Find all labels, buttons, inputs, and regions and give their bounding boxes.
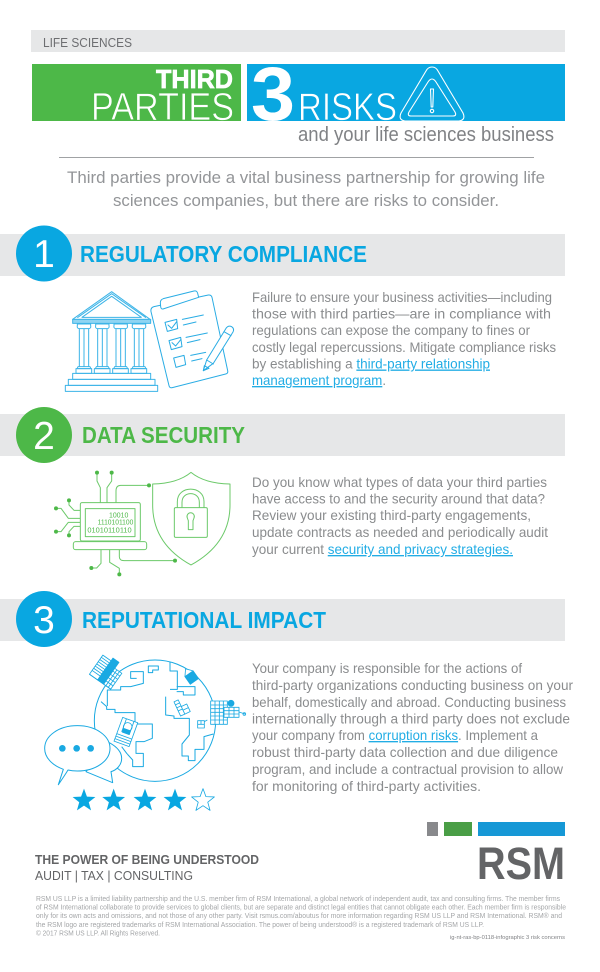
body text: reputational impact: Your company is responsible for the actions of	[252, 661, 522, 676]
body text: reputational impact: behalf, domestically and abroad. Conducting business	[252, 695, 566, 710]
footer: logo blocks and RSM logo: RSM	[477, 838, 565, 889]
icon: globe with buildings, speech bubbles	[45, 652, 246, 810]
body text: reputational impact: internationally through a third party does not exclude	[252, 712, 570, 726]
category bar	[31, 30, 565, 52]
footer: disclaimer	[36, 896, 566, 938]
body text: reputational impact: third-party organizations conducting business on your	[252, 678, 573, 693]
number badge 3: 3	[33, 599, 55, 642]
body text: regulatory compliance: management program.	[252, 373, 386, 388]
body text: reputational impact: program, and include a contractual provision to allow	[252, 762, 563, 777]
body text: data security	[252, 475, 548, 557]
footer: disclaimer: © 2017 RSM US LLP. All Rights Reserved.	[36, 930, 160, 938]
number badge 1	[16, 226, 72, 282]
footer: disclaimer: the RSM logo are registered trademarks of RSM International Association. The power of being understood® is a registered trademark of RSM US LLP.	[36, 921, 484, 929]
panel: reputational impact	[0, 591, 573, 810]
footer: disclaimer: only for its own acts and omissions, and not those of any other party. Visit rsmus.com/aboutus for more information regarding RSM US LLP and RSM International. RSM® and	[36, 912, 562, 920]
number badge 2	[16, 407, 72, 463]
body text: reputational impact	[252, 661, 573, 794]
body text: reputational impact: robust third-party data collection and due diligence	[252, 745, 558, 760]
footer: tagline: AUDIT | TAX | CONSULTING	[35, 868, 193, 883]
body text: data security: Review your existing third-party engagements,	[252, 508, 531, 523]
laptop: 10010	[109, 510, 128, 519]
shield and padlock	[153, 472, 230, 565]
footer: tagline: THE POWER OF BEING UNDERSTOOD	[35, 852, 259, 867]
body text: regulatory compliance: Failure to ensure your business activities—including	[252, 290, 552, 305]
number badge 1: 1	[33, 233, 55, 276]
laptop: 01010110110	[87, 525, 132, 534]
intro text: Third parties provide a vital business partnership for growing life	[67, 168, 545, 187]
body text: data security: Do you know what types of data your third parties	[252, 475, 547, 490]
title banner	[32, 52, 565, 137]
body text: reputational impact: for monitoring of third-party activities.	[252, 779, 481, 794]
number badge 2: 2	[33, 415, 55, 458]
body text: reputational impact: your company from corruption risks. Implement a	[252, 728, 538, 743]
subtitle: and your life sciences business	[298, 124, 554, 146]
body text: regulatory compliance: regulations can expose the company to fines or	[252, 323, 530, 338]
icon: clipboard and pencil	[151, 291, 234, 388]
body text: data security: have access to and the security around that data?	[252, 492, 545, 506]
star rating	[73, 789, 214, 810]
body text: data security: your current security and privacy strategies.	[252, 542, 513, 557]
title banner: 3	[251, 52, 295, 137]
title banner: THIRD	[156, 64, 233, 94]
panel: data security	[0, 407, 565, 576]
panel: regulatory compliance	[0, 226, 565, 391]
globe	[94, 660, 216, 781]
body text: data security: update contracts as needed and periodically audit	[252, 525, 548, 540]
title banner: PARTIES	[91, 86, 234, 129]
category bar: LIFE SCIENCES	[43, 35, 132, 50]
intro text	[67, 168, 545, 210]
number badge 3	[16, 591, 72, 647]
footer: tagline	[35, 852, 259, 883]
icon: courthouse	[65, 292, 158, 391]
intro text: sciences companies, but there are risks to consider.	[113, 191, 499, 210]
body text: regulatory compliance: by establishing a third-party relationship	[252, 356, 490, 372]
icon: laptop circuit and shield	[54, 471, 230, 576]
body text: regulatory compliance: costly legal repercussions. Mitigate compliance risks	[252, 340, 556, 355]
laptop: 1110101100	[98, 517, 133, 526]
footer: disclaimer: of RSM International collaborate to provide services to global clients, but are separate and distinct legal entities that cannot obligate each other. Each member firm is responsible	[36, 904, 566, 912]
footer: logo blocks and RSM logo	[427, 822, 565, 889]
footer: disclaimer: RSM US LLP is a limited liability partnership and the U.S. member firm of RSM International, a global network of independent audit, tax and consulting firms. The member firms	[36, 896, 561, 903]
icon: warning triangle	[400, 67, 464, 121]
body text: regulatory compliance	[252, 290, 556, 388]
footer: document code: ig-nt-ras-bp-0118-infographic 3 risk concerns	[450, 935, 565, 941]
heading: reputational impact: REPUTATIONAL IMPACT	[82, 607, 326, 633]
buildings on globe	[89, 652, 246, 747]
speech bubbles	[45, 726, 122, 785]
circuit traces	[54, 471, 177, 576]
heading: regulatory compliance: REGULATORY COMPLIANCE	[80, 241, 367, 267]
laptop	[73, 503, 147, 550]
body text: regulatory compliance: those with third parties—are in compliance with	[252, 306, 551, 322]
title banner: RISKS	[298, 86, 397, 129]
heading: data security: DATA SECURITY	[82, 422, 245, 448]
